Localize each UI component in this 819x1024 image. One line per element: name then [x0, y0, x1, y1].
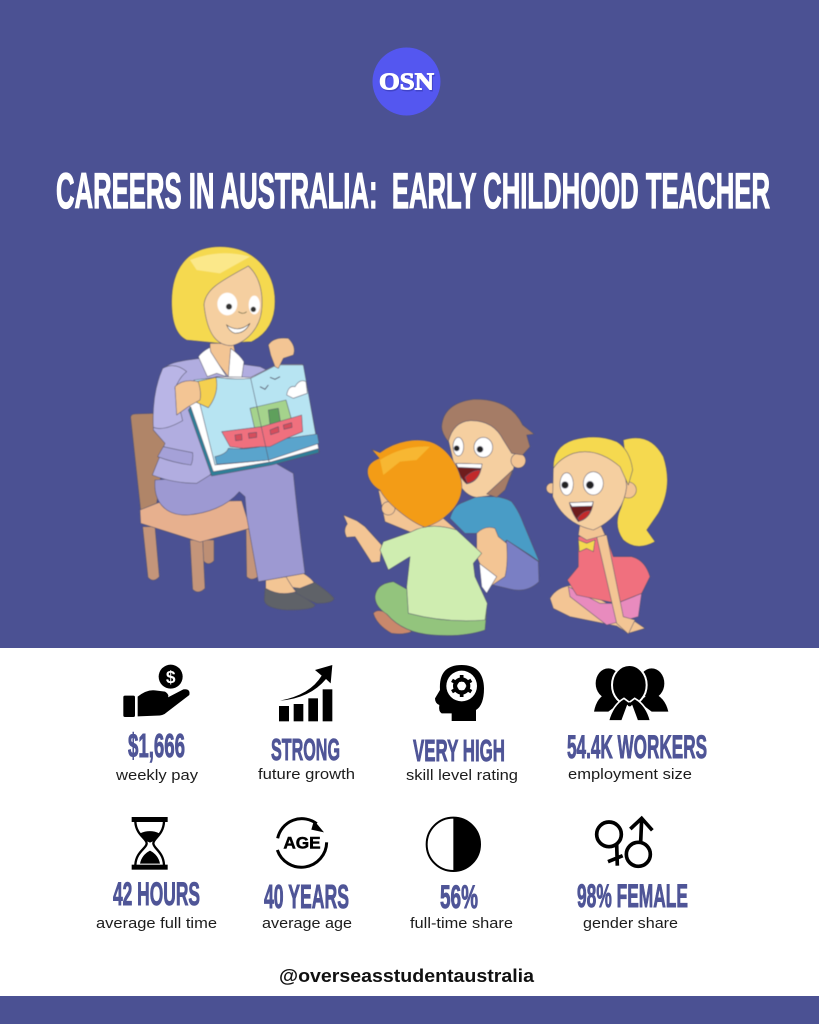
brown-haired boy — [442, 399, 539, 593]
pocket — [158, 447, 193, 465]
sleeve — [153, 366, 187, 429]
logo: OSN — [379, 70, 435, 96]
neck and collar — [198, 343, 244, 378]
stat: gender share: 98% FEMALE — [577, 878, 688, 914]
stat: skill level rating — [406, 733, 518, 784]
feet and shoes — [264, 573, 334, 610]
stat: gender share — [577, 878, 688, 932]
icon: group of people — [594, 665, 668, 721]
stat: weekly pay: weekly pay — [115, 767, 199, 784]
bottom band — [0, 996, 819, 1024]
stat: skill level rating: VERY HIGH — [413, 733, 505, 768]
stat: future growth: STRONG — [271, 732, 340, 767]
hand on book and sun — [175, 338, 294, 415]
stat: full-time share — [410, 879, 513, 932]
logo: OSN — [380, 71, 436, 97]
stat: skill level rating: skill level rating — [406, 767, 518, 784]
book — [183, 364, 319, 476]
hair and face — [172, 247, 275, 346]
stat: full-time share: 56% — [440, 879, 478, 915]
illustration: teacher on chair reading a book — [131, 247, 334, 610]
stat: future growth — [258, 732, 355, 783]
blonde girl — [546, 437, 667, 634]
stat: average full time: 42 HOURS — [113, 876, 200, 912]
icon: hourglass — [132, 817, 168, 870]
stat: employment size: employment size — [568, 766, 692, 783]
chair — [131, 413, 258, 592]
stat: gender share: gender share — [583, 915, 678, 932]
icon: hand holding coin — [123, 665, 190, 717]
icon: half-filled circle — [427, 818, 480, 871]
illustration: three children — [343, 399, 667, 636]
white stats panel — [0, 648, 819, 996]
stat: employment size — [567, 729, 707, 783]
stat: full-time share: full-time share — [410, 915, 513, 932]
stat: average full time: average full time — [96, 915, 217, 932]
icon: age cycle — [277, 819, 327, 867]
stat: average age: average age — [262, 915, 352, 932]
stat: weekly pay — [115, 727, 199, 784]
stat: average full time — [96, 876, 217, 932]
social handle: @overseasstudentaustralia — [279, 966, 535, 986]
icon: hand holding coin: $ — [166, 667, 176, 687]
trousers — [155, 460, 305, 582]
icon: growth chart — [279, 665, 332, 721]
icon: gender symbols — [597, 818, 652, 866]
icon: head with gear — [435, 665, 484, 721]
orange-haired boy — [343, 440, 487, 636]
top background panel — [0, 0, 819, 648]
stat: future growth: future growth — [258, 766, 355, 783]
icon: age cycle: AGE — [283, 833, 321, 852]
stat: average age: 40 YEARS — [264, 878, 349, 915]
stat: weekly pay: $1,666 — [128, 727, 185, 764]
stat: average age — [262, 878, 352, 932]
logo — [372, 48, 440, 116]
jacket — [152, 358, 270, 483]
